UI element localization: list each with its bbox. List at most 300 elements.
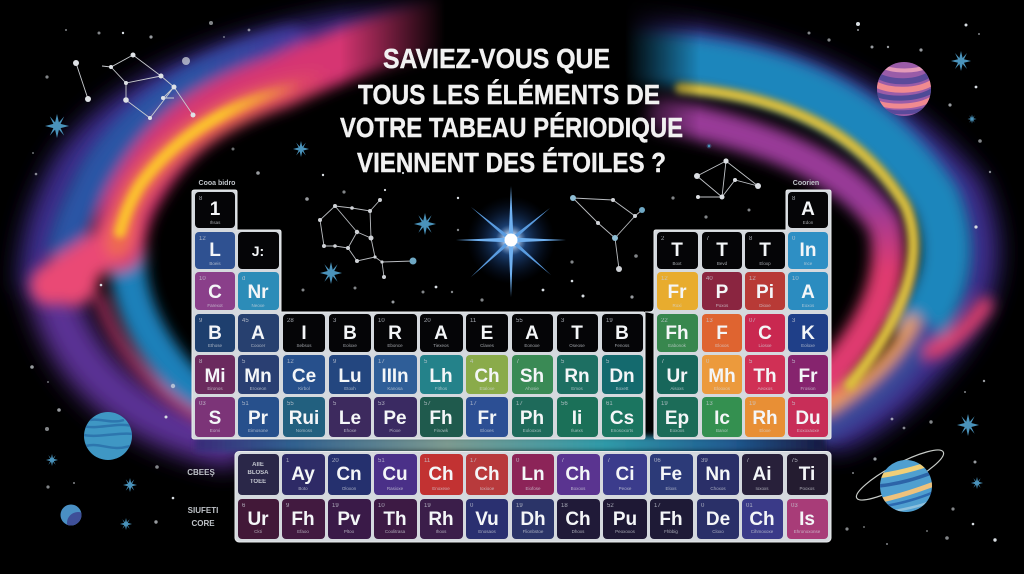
element Cs: 61 [606,401,613,407]
element 1 [195,192,235,228]
element Th: Aeoxos [757,386,773,391]
element T [745,232,785,269]
element A: Eoxos [802,303,815,308]
element A: A [525,323,539,344]
element De [697,499,739,539]
side label: bottom row: SIUFETI [188,506,218,515]
element B [602,314,643,352]
element Ch: Etaloxe [479,386,495,391]
element Ru [283,397,325,437]
element Lh [420,355,463,394]
element Rh [420,499,463,539]
element Nn: Choxos [710,486,726,491]
rainbow arc: right [610,36,985,432]
element B: Eoloxe [343,343,357,348]
element C: Liosxe [758,343,772,348]
element Vu [466,499,508,539]
element Pe [374,397,417,437]
element Ph: Eolooxos [523,428,542,433]
element Ur: 7 [661,359,665,365]
element Ch: Dhoxs [572,529,585,534]
element B: Ethose [208,343,222,348]
legend cell: TOEE [250,479,266,485]
element 1: Ihsas [210,220,221,225]
element Ep: 19 [661,401,668,407]
element Th: 10 [378,503,385,509]
element L: Boeis [209,261,221,266]
element Fr: Roxi [672,303,682,308]
element E: 11 [470,318,477,324]
element Lu: Etoxh [344,386,356,391]
element Nr: Nr [247,282,269,303]
element A: 10 [792,276,799,282]
element De: De [706,509,730,530]
element Nn: 39 [701,458,708,464]
element Cu [374,454,417,495]
element IIIn: 17 [378,359,385,365]
icon: sparkle stars [45,51,983,530]
element Pr: 51 [242,401,249,407]
element Ch [420,454,463,495]
element K: Eoloxe [801,343,815,348]
element T: 3 [561,318,565,324]
element T: Bevd [717,261,728,266]
element B: B [343,323,357,344]
element Fr: 12 [661,276,668,282]
element Ep [657,397,698,437]
element Ce: Ce [292,366,316,387]
element Ch: Ioxiooe [480,486,495,491]
element IIIn: IIIn [382,366,408,387]
label: left group header: Cooa bidro [199,180,235,187]
element Ci [603,454,647,495]
element Ln [512,454,554,495]
element A [512,314,553,352]
element K: K [801,323,815,344]
element Lh: Lh [429,366,453,387]
element Ch: 4 [470,359,474,365]
element Ch: Ch [428,464,454,485]
element Fr: Fr [478,408,497,429]
element C: C [208,282,222,303]
element K: 3 [792,318,796,324]
element Le: Ehoxe [344,428,357,433]
element C: 07 [749,318,756,324]
element T: T [671,240,683,261]
element T: T [759,240,771,261]
constellation: top right [694,158,761,200]
element A: A [801,282,815,303]
element Fh: Fh [291,509,315,530]
element Ci: Peoxe [619,486,632,491]
element Pe: 53 [378,401,385,407]
element Dh: 19 [516,503,523,509]
element Fr: Fr [798,366,818,387]
element Ai [742,454,783,495]
element Rh [745,397,785,437]
element Sh [512,355,553,394]
legend cell [238,454,279,495]
element T: Eloxp [759,261,771,266]
element Ch: 17 [470,458,477,464]
planet: small blue [60,504,82,526]
element Mn [238,355,279,394]
element Rn: Rn [564,366,590,387]
element T: T [571,323,583,344]
element Mn: Mn [244,366,272,387]
glow under table [195,436,825,452]
element R: Ebonce [387,343,403,348]
element Ch: Cihmoxoxe [751,529,774,534]
element Is [787,499,828,539]
element B: B [208,323,222,344]
element Ci: Ci [616,464,634,485]
element Pv [328,499,371,539]
element Fh: Eabonok [668,343,687,348]
element Cn [328,454,371,495]
element Nr: d [242,276,245,282]
element Rh: Eloxe [759,428,771,433]
element Fr: 17 [470,401,477,407]
element Ch: Ch [474,464,500,485]
element T: Boxt [672,261,682,266]
element Cu: Rasioxe [387,486,404,491]
element Th: Th [383,509,407,530]
element Rh: Rh [752,408,778,429]
element Rh: Ihoxs [436,529,447,534]
element P: 40 [706,276,713,282]
element Mi: Mi [204,366,226,387]
element T [657,232,698,269]
element T: 7 [706,236,710,242]
element E: Claves [480,343,495,348]
element Fh [657,314,698,352]
element Ln: Eiofose [525,486,541,491]
element Pu: Peoxoxos [615,529,636,534]
element Cn: Cn [336,464,362,485]
element F: F [716,323,728,344]
element Cs: Cs [610,408,634,429]
element A: 45 [242,318,249,324]
element Dn: 5 [606,359,610,365]
element Rn: 5 [561,359,565,365]
constellation: top left [73,52,196,120]
element R: 10 [378,318,385,324]
element Ic: Ic [714,408,730,429]
element Nr: Neoxe [251,303,265,308]
element Ti: 75 [791,458,798,464]
element Fh: Fh [429,408,453,429]
element C: Farexot [207,303,223,308]
element Th [374,499,417,539]
element Th: Coolitrasa [385,529,406,534]
element J: J: [252,243,264,259]
element Lu: 9 [333,359,337,365]
icon: central bright star [456,186,566,297]
element Nn [697,454,739,495]
element I [283,314,325,352]
element E [466,314,508,352]
element Ii: Ii [572,408,582,429]
element K [788,314,828,352]
label: right group header: Coorien [793,180,819,187]
element Rh: 19 [749,401,756,407]
element Ur: 6 [242,503,246,509]
element Rh: 19 [424,503,431,509]
right block frame [645,190,831,439]
element Fh: Efaoo [297,529,309,534]
element Pu [603,499,647,539]
element Pi: 12 [749,276,756,282]
element J [238,232,279,269]
element Ti: Pooxos [799,486,815,491]
element Ch [466,355,508,394]
element Du: Du [795,408,821,429]
element F: 13 [706,318,713,324]
element Pi: Pi [756,282,774,303]
element Pi [745,272,785,310]
element Ch: Ch [565,464,591,485]
element In: Ince [804,261,813,266]
element Lu: Lu [338,366,362,387]
element Dh: Dh [520,509,546,530]
element Pv: Pltoo [344,529,355,534]
element Fh: Fhbbig [664,529,678,534]
element Pe: Pioxe [389,428,401,433]
element Mn: 5 [242,359,246,365]
element Pe: Pe [383,408,407,429]
element Sh: Sh [520,366,544,387]
element Dn [602,355,643,394]
element L: L [209,240,221,261]
element S: 03 [199,401,206,407]
element Pi: Dioxe [759,303,771,308]
title [340,43,683,178]
element De: 0 [701,503,705,509]
element A: A [434,323,448,344]
element Pv: 19 [332,503,339,509]
element A: Edon [803,220,814,225]
periodic table: right block [645,190,831,439]
rainbow arc: left [38,22,450,442]
element B [195,314,235,352]
element Ic [702,397,742,437]
element S [195,397,235,437]
element Fh: 57 [424,401,431,407]
bottom block frame [235,452,831,542]
element In: 0 [792,236,796,242]
element Nn: Nn [705,464,731,485]
element Mh: 0 [706,359,710,365]
element Pr: Pr [248,408,269,429]
element Th: 5 [749,359,753,365]
element S: Eorvi [210,428,220,433]
element Ci: 7 [607,458,611,464]
element A [238,314,279,352]
element Fh: 22 [661,318,668,324]
element A: Tiexeos [433,343,450,348]
element Mh: Elooxos [714,386,731,391]
element Ce: Kirbol [298,386,310,391]
element A: 20 [424,318,431,324]
element Ch: Ch [474,366,500,387]
element Ii [557,397,598,437]
element Mh [702,355,742,394]
element B: 3 [333,318,337,324]
element S: S [209,408,221,429]
side label: bottom row: CORE [191,519,215,528]
side label: top row: CBEEŞ [187,468,215,477]
element Fe: Eloxs [665,486,677,491]
element F [702,314,742,352]
element C [745,314,785,352]
element C: 10 [199,276,206,282]
element 1: 8 [199,196,203,202]
element Fr: Frosion [800,386,816,391]
planet: ringed [856,449,944,512]
element B: B [615,323,629,344]
element Ru: Rui [289,408,319,429]
element Fe: 06 [654,458,661,464]
element Ch: 01 [746,503,753,509]
element Pu: Pu [613,509,637,530]
element T: T [716,240,728,261]
element Mi: 8 [199,359,203,365]
element Rh: Rh [428,509,454,530]
element Ch [742,499,783,539]
element Fr [788,355,828,394]
element Fr: Fr [668,282,687,303]
element T [702,232,742,269]
element Fh: Finowk [434,428,449,433]
element A: Eonoxe [524,343,540,348]
element Dh [512,499,554,539]
element Mn: Eroxeon [250,386,267,391]
element Ur [657,355,698,394]
element Th [745,355,785,394]
element F: Eloxos [715,343,729,348]
element Vu: Enosaos [478,529,497,534]
left block frame [192,190,645,439]
element B: Fenoss [615,343,630,348]
element I: Sebsos [296,343,312,348]
element Dn: Boxett [616,386,629,391]
element P: Poxos [716,303,729,308]
element B [329,314,371,352]
element Fh [282,499,325,539]
element Ay [282,454,325,495]
legend cell: AIIE [252,462,264,468]
element Pr [238,397,279,437]
element In: In [800,240,816,261]
element Fh: 17 [654,503,661,509]
element Ch: 11 [424,458,431,464]
periodic table: left block [192,190,645,439]
element Fr: Eloxes [480,428,494,433]
element Du: Eoxoxaoxe [797,428,820,433]
element A [788,272,828,310]
constellation: centre left [318,198,416,279]
element Ii: 56 [561,401,568,407]
element Vu: 0 [470,503,474,509]
title: VIENNENT DES ÉTOILES ? [357,147,666,178]
element De: Cloxo [712,529,724,534]
element Sh: 7 [516,359,520,365]
element Is: Ehronoxonse [794,529,821,534]
element Cu: Cu [382,464,408,485]
element Ep: Eoxoxs [670,428,685,433]
element Cn: 20 [332,458,339,464]
element Is: Is [799,509,815,530]
element Ai: 7 [746,458,750,464]
planet: pink striped [875,62,933,116]
element B: 9 [199,318,203,324]
element Ch: 7 [561,458,565,464]
element Ch: Ch [565,509,591,530]
element E: E [481,323,493,344]
element Ch: Boxoxs [571,486,586,491]
element Ti: Ti [799,464,815,485]
element Ch: Ch [749,509,775,530]
element Cn: Oloxon [342,486,357,491]
element A: 8 [792,196,796,202]
periodic table: bottom block [235,452,831,542]
side label: bottom row [188,506,218,528]
element Ai: Ai [752,464,772,485]
element Pr: Eimosone [248,428,268,433]
element I: I [301,323,307,344]
element 1: 1 [210,199,221,220]
element Vu: Vu [475,509,499,530]
element Cs: Enosoxorts [611,428,634,433]
element Ch [466,454,508,495]
element C [195,272,235,310]
element IIIn: Kanosa [387,386,403,391]
element Pu: 52 [607,503,614,509]
element Ur [238,499,279,539]
element Ch [557,499,600,539]
element Ic: 13 [706,401,713,407]
element P [702,272,742,310]
element A: 55 [516,318,523,324]
element Ce: 12 [287,359,294,365]
element L: 12 [199,236,206,242]
element C: C [758,323,772,344]
element B: 19 [606,318,613,324]
element Ur: Ur [666,366,688,387]
element Ln: Ln [521,464,545,485]
element Lh: Fithos [435,386,448,391]
element T: 8 [749,236,753,242]
element T: Oseose [569,343,585,348]
element I: 28 [287,318,294,324]
element T: 2 [661,236,665,242]
element Fh: Fh [659,509,683,530]
element Sh: Ahosie [525,386,539,391]
element R [374,314,417,352]
element Ch: Enoxexe [432,486,450,491]
element A [420,314,463,352]
element Nr [238,272,279,310]
title: SAVIEZ-VOUS QUE [383,43,610,74]
element Lh: 5 [424,359,428,365]
element Cs [602,397,643,437]
element Fe [650,454,693,495]
element Ru: Nomoss [296,428,313,433]
element Fh: Fh [665,323,689,344]
element Fh [650,499,693,539]
element Dn: Dn [609,366,635,387]
